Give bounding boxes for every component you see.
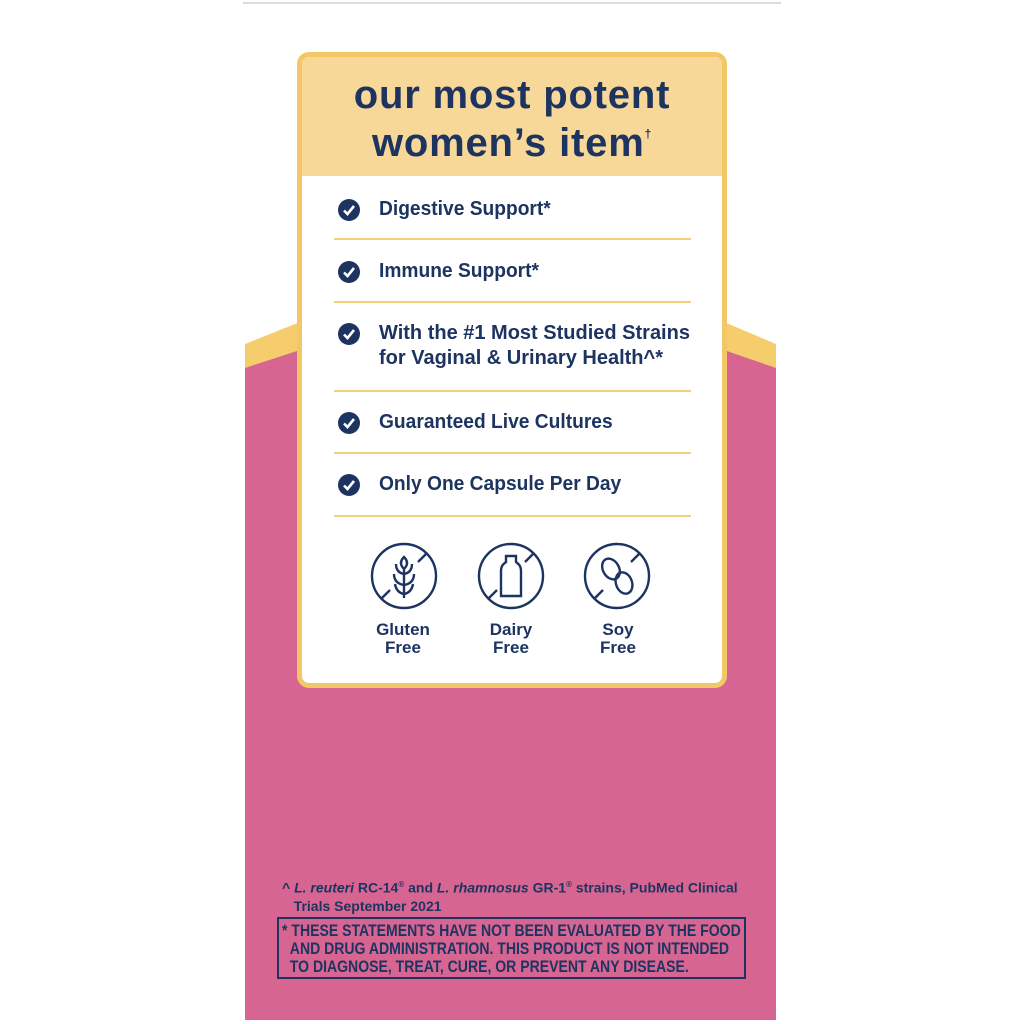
- icon: gluten free: [370, 542, 438, 610]
- footnote: ^ L. reuteri RC-14® and L. rhamnosus GR-1® strains, PubMed Clinical: [282, 880, 738, 896]
- item: strains: With the #1 Most Studied Strains: [379, 322, 690, 344]
- title: [354, 73, 670, 165]
- label: dairy free: Dairy: [490, 620, 532, 639]
- item: immune: Immune Support*: [379, 260, 539, 282]
- disclaimer box: TO DIAGNOSE, TREAT, CURE, OR PREVENT ANY DISEASE.: [290, 957, 689, 976]
- label: soy free: [600, 620, 636, 657]
- label: gluten free: Free: [385, 638, 421, 657]
- top rule: [243, 2, 781, 4]
- title: women’s item†: [372, 121, 652, 165]
- item: strains: for Vaginal & Urinary Health^*: [379, 347, 663, 369]
- icon: soy free: [584, 542, 650, 610]
- label: gluten free: [376, 620, 430, 657]
- label: soy free: Soy: [602, 620, 634, 639]
- card header: [302, 57, 722, 176]
- item: live cultures: Guaranteed Live Cultures: [379, 411, 613, 433]
- label: dairy free: [490, 620, 532, 657]
- label: dairy free: Free: [493, 638, 529, 657]
- footnote: Trials September 2021: [294, 898, 442, 914]
- item: strains: [338, 322, 690, 369]
- label: soy free: Free: [600, 638, 636, 657]
- disclaimer box: AND DRUG ADMINISTRATION. THIS PRODUCT IS NOT INTENDED: [290, 939, 729, 958]
- item: digestive: Digestive Support*: [379, 198, 551, 220]
- footnote: [282, 880, 738, 914]
- icon: dairy free: [478, 542, 544, 610]
- card: [297, 52, 727, 688]
- item: one capsule: Only One Capsule Per Day: [379, 473, 621, 495]
- disclaimer box: [277, 917, 746, 979]
- disclaimer box: * THESE STATEMENTS HAVE NOT BEEN EVALUATED BY THE FOOD: [282, 921, 741, 940]
- title: our most potent: [354, 73, 670, 117]
- label: gluten free: Gluten: [376, 620, 430, 639]
